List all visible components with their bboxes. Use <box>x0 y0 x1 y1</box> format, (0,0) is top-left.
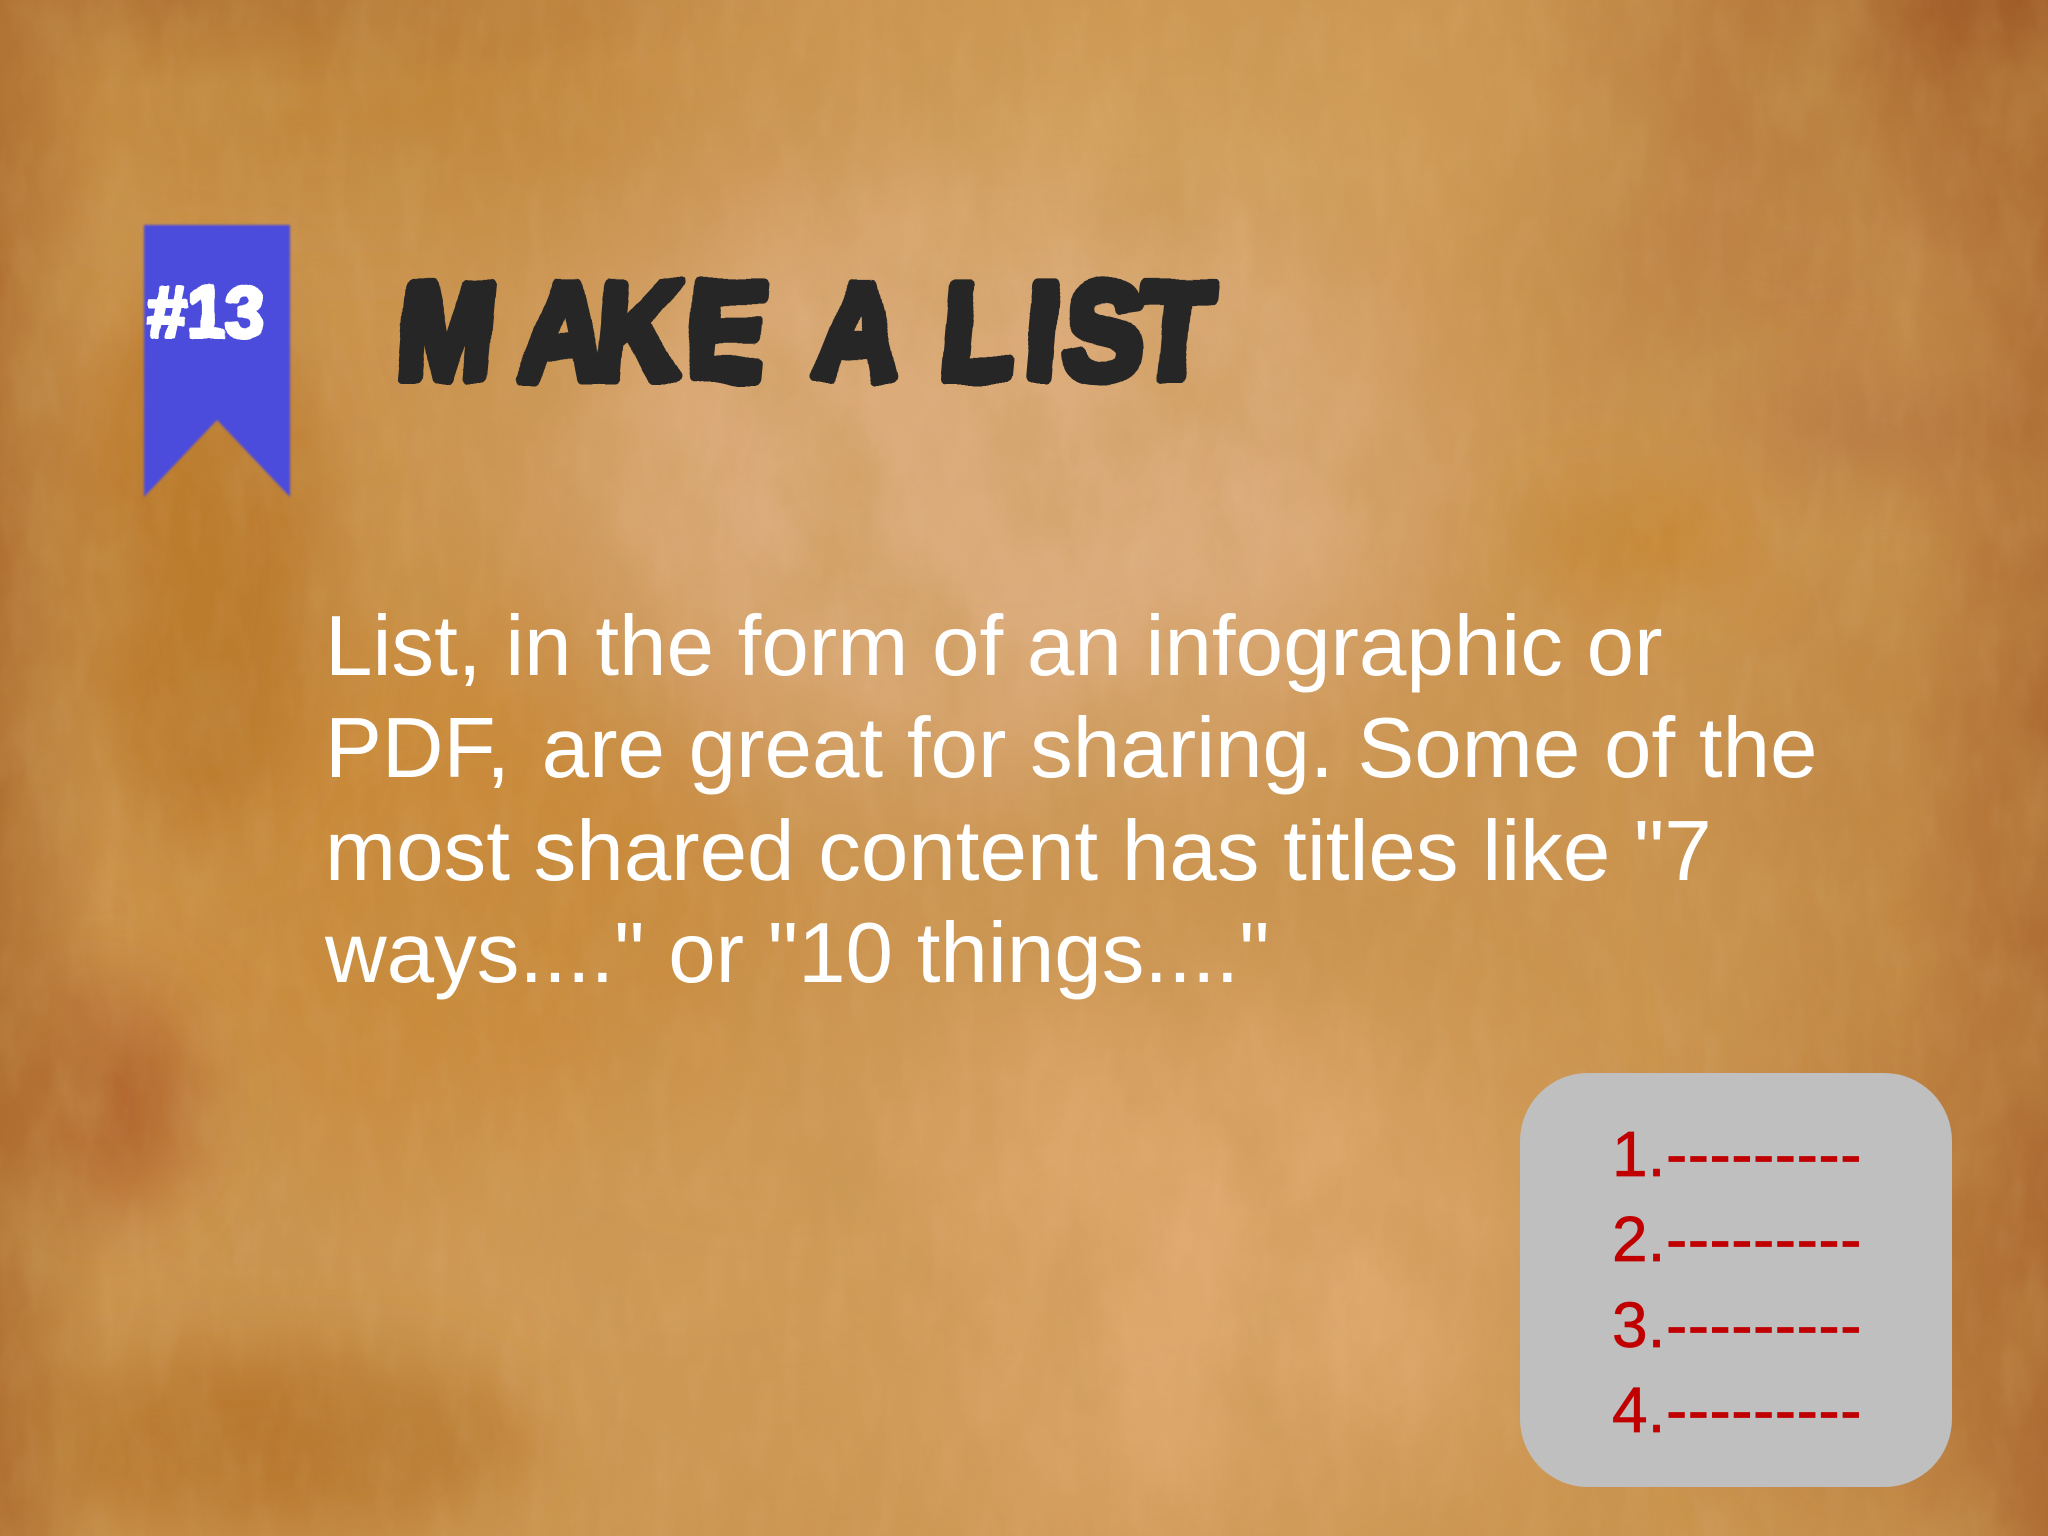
body text: most shared content has titles like "7 <box>325 804 1712 899</box>
body text: ways...." or "10 things...." <box>324 906 1270 1001</box>
list items: --------- <box>1666 1118 1862 1190</box>
list items: 1. <box>1612 1118 1665 1190</box>
body text <box>324 599 1818 1001</box>
badge number: #13 <box>148 273 264 353</box>
list items: --------- <box>1666 1289 1862 1361</box>
card background <box>1520 1073 1952 1487</box>
list items: 4. <box>1612 1374 1665 1446</box>
list items: --------- <box>1666 1203 1862 1275</box>
list card <box>1520 1073 1952 1487</box>
title: MAKE A LIST <box>392 254 1217 407</box>
list items <box>1612 1118 1862 1446</box>
body text: PDF, are great for sharing. Some of the <box>325 701 1818 796</box>
list items: 2. <box>1612 1203 1665 1275</box>
ribbon shape <box>144 225 290 497</box>
list items: 3. <box>1612 1289 1665 1361</box>
list items: --------- <box>1666 1374 1862 1446</box>
ribbon badge <box>144 225 290 497</box>
body text: List, in the form of an infographic or <box>325 599 1663 694</box>
